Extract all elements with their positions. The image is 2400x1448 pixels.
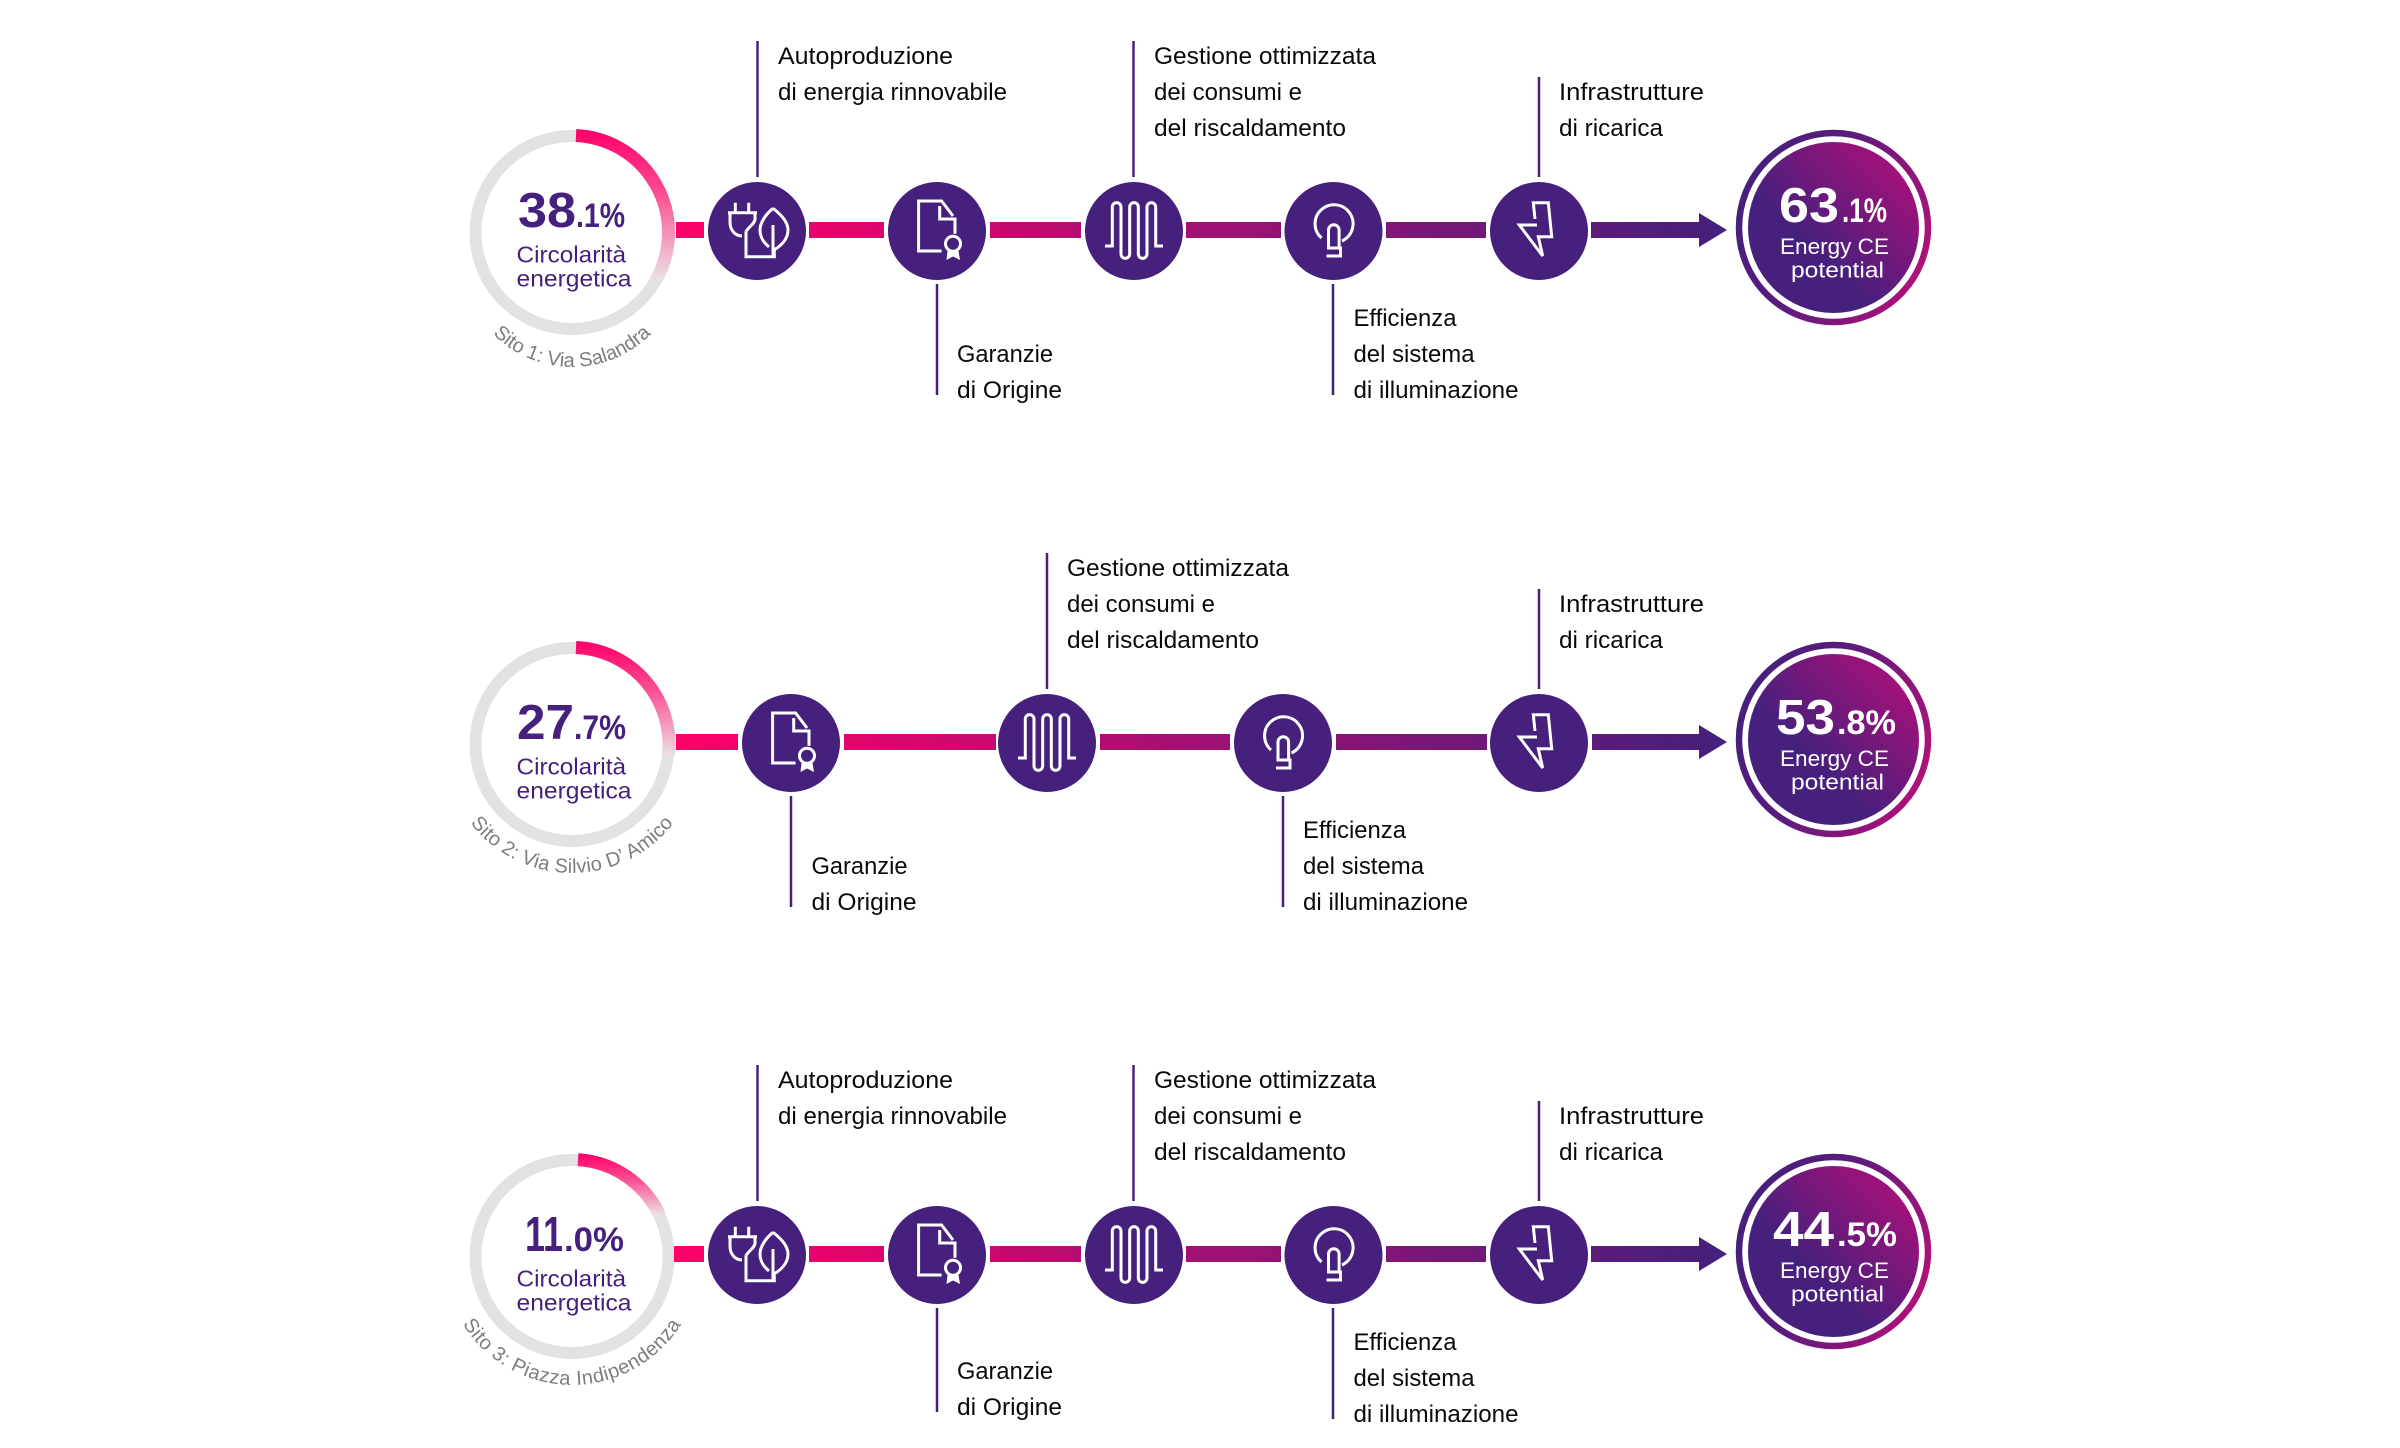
callout: Efficienza [1333, 284, 1518, 404]
callout: Efficienza: di illuminazione [1354, 1401, 1518, 1428]
connector bar [674, 1237, 1727, 1271]
callout: Garanzie: di Origine [957, 377, 1062, 404]
progress ring 38.1% [476, 136, 668, 329]
icon: radiator [1085, 1206, 1183, 1304]
callout: Gestione: dei consumi e [1154, 79, 1302, 106]
result badge 44.5%: 44 [1773, 1203, 1834, 1257]
value 27.7% [517, 696, 626, 750]
icon: certificate [742, 694, 840, 792]
site name: Sito 1: Via Salandra [495, 326, 652, 368]
callout: Efficienza: del sistema [1354, 341, 1475, 368]
icon: lightning [1490, 1206, 1588, 1304]
icon: certificate [888, 1206, 986, 1304]
caption [516, 754, 632, 804]
callout: Infrastrutture: Infrastrutture [1559, 591, 1704, 618]
icon: light bulb [1284, 1206, 1382, 1304]
icon: plug and leaf [708, 182, 806, 280]
value 38.1%: 38 [518, 184, 576, 238]
caption [516, 1266, 632, 1316]
callout: Autoproduzione: di energia rinnovabile [778, 79, 1007, 106]
site name: Sito 3: Piazza Indipendenza [464, 1318, 681, 1385]
callout: Efficienza: Efficienza [1354, 1329, 1457, 1356]
callout: Gestione [1134, 41, 1377, 177]
result badge 53.8% [1739, 645, 1928, 834]
result badge 53.8%: .8% [1837, 704, 1896, 742]
callout: Gestione: Gestione ottimizzata [1154, 43, 1377, 70]
result badge 63.1%: potential [1791, 258, 1884, 283]
icon: lightning [1490, 182, 1588, 280]
callout: Gestione: del riscaldamento [1154, 1139, 1346, 1166]
caption: Circolarità [516, 754, 626, 780]
callout: Garanzie [791, 796, 916, 916]
icon: radiator [998, 694, 1096, 792]
callout: Infrastrutture [1539, 589, 1704, 689]
caption: Circolarità [516, 242, 626, 268]
result badge 44.5%: potential [1791, 1282, 1884, 1307]
callout: Gestione: dei consumi e [1067, 591, 1215, 618]
result badge 63.1%: .1% [1842, 192, 1887, 230]
icon: radiator [1085, 182, 1183, 280]
callout: Autoproduzione [758, 1065, 1007, 1201]
callout: Efficienza: del sistema [1354, 1365, 1475, 1392]
result badge 44.5% [1739, 1157, 1928, 1346]
callout: Efficienza: di illuminazione [1303, 889, 1468, 916]
callout: Infrastrutture: di ricarica [1559, 1139, 1664, 1166]
caption: energetica [516, 778, 632, 804]
connector bar [676, 725, 1727, 759]
result badge 63.1% [1739, 133, 1928, 322]
callout: Infrastrutture [1539, 77, 1704, 177]
icon: light bulb [1234, 694, 1332, 792]
callout: Efficienza: Efficienza [1354, 305, 1457, 332]
callout: Garanzie: di Origine [812, 889, 916, 916]
callout: Gestione: Gestione ottimizzata [1154, 1067, 1377, 1094]
caption: energetica [516, 266, 632, 292]
callout: Autoproduzione: Autoproduzione [778, 1067, 953, 1094]
callout: Efficienza: Efficienza [1303, 817, 1407, 844]
callout: Gestione: del riscaldamento [1154, 115, 1346, 142]
callout: Gestione: del riscaldamento [1067, 627, 1259, 654]
progress ring 27.7% [476, 648, 669, 841]
callout: Autoproduzione: Autoproduzione [778, 43, 953, 70]
icon: lightning [1490, 694, 1588, 792]
caption [516, 242, 632, 292]
row 2: Sito 2 Via Silvio D'Amico [470, 553, 1932, 916]
icon: plug and leaf [708, 1206, 806, 1304]
callout: Garanzie [937, 1308, 1062, 1421]
result badge 53.8%: 53 [1776, 691, 1835, 745]
callout: Garanzie: Garanzie [812, 853, 908, 880]
callout: Efficienza [1283, 796, 1468, 916]
value 38.1% [518, 184, 625, 238]
icon: light bulb [1284, 182, 1382, 280]
callout: Gestione: dei consumi e [1154, 1103, 1302, 1130]
result badge 53.8%: potential [1791, 770, 1884, 795]
result badge 63.1%: 63 [1779, 179, 1839, 233]
callout: Autoproduzione [758, 41, 1007, 177]
value 11.0%: .0% [564, 1221, 624, 1259]
row 1: Sito 1 Via Salandra [470, 41, 1932, 404]
callout: Gestione [1134, 1065, 1377, 1201]
result badge 44.5%: Energy CE [1780, 1258, 1889, 1283]
callout: Infrastrutture: di ricarica [1559, 115, 1664, 142]
callout: Garanzie: di Origine [957, 1394, 1062, 1421]
callout: Garanzie: Garanzie [957, 1358, 1053, 1385]
progress ring 11.0% [476, 1160, 668, 1353]
callout: Infrastrutture: Infrastrutture [1559, 79, 1704, 106]
callout: Efficienza [1333, 1308, 1518, 1428]
callout: Garanzie: Garanzie [957, 341, 1053, 368]
caption: Circolarità [516, 1266, 626, 1292]
result badge 44.5%: .5% [1837, 1216, 1897, 1254]
result badge 63.1%: Energy CE [1780, 234, 1889, 259]
icon: certificate [888, 182, 986, 280]
site name: Sito 2: Via Silvio D’ Amico [472, 816, 672, 873]
value 11.0%: 11 [525, 1208, 563, 1262]
callout: Garanzie [937, 284, 1062, 404]
callout: Infrastrutture: di ricarica [1559, 627, 1664, 654]
callout: Infrastrutture: Infrastrutture [1559, 1103, 1704, 1130]
callout: Autoproduzione: di energia rinnovabile [778, 1103, 1007, 1130]
value 27.7%: 27 [517, 696, 574, 750]
connector bar [676, 213, 1727, 247]
callout: Efficienza: di illuminazione [1354, 377, 1518, 404]
value 27.7%: .7% [574, 709, 626, 747]
callout: Gestione [1047, 553, 1290, 689]
callout: Efficienza: del sistema [1303, 853, 1425, 880]
result badge 53.8%: Energy CE [1780, 746, 1889, 771]
caption: energetica [516, 1290, 632, 1316]
row 3: Sito 3 Piazza Indipendenza [464, 1065, 1932, 1428]
callout: Infrastrutture [1539, 1101, 1704, 1201]
value 11.0% [525, 1208, 624, 1262]
value 38.1%: .1% [576, 197, 625, 235]
callout: Gestione: Gestione ottimizzata [1067, 555, 1290, 582]
